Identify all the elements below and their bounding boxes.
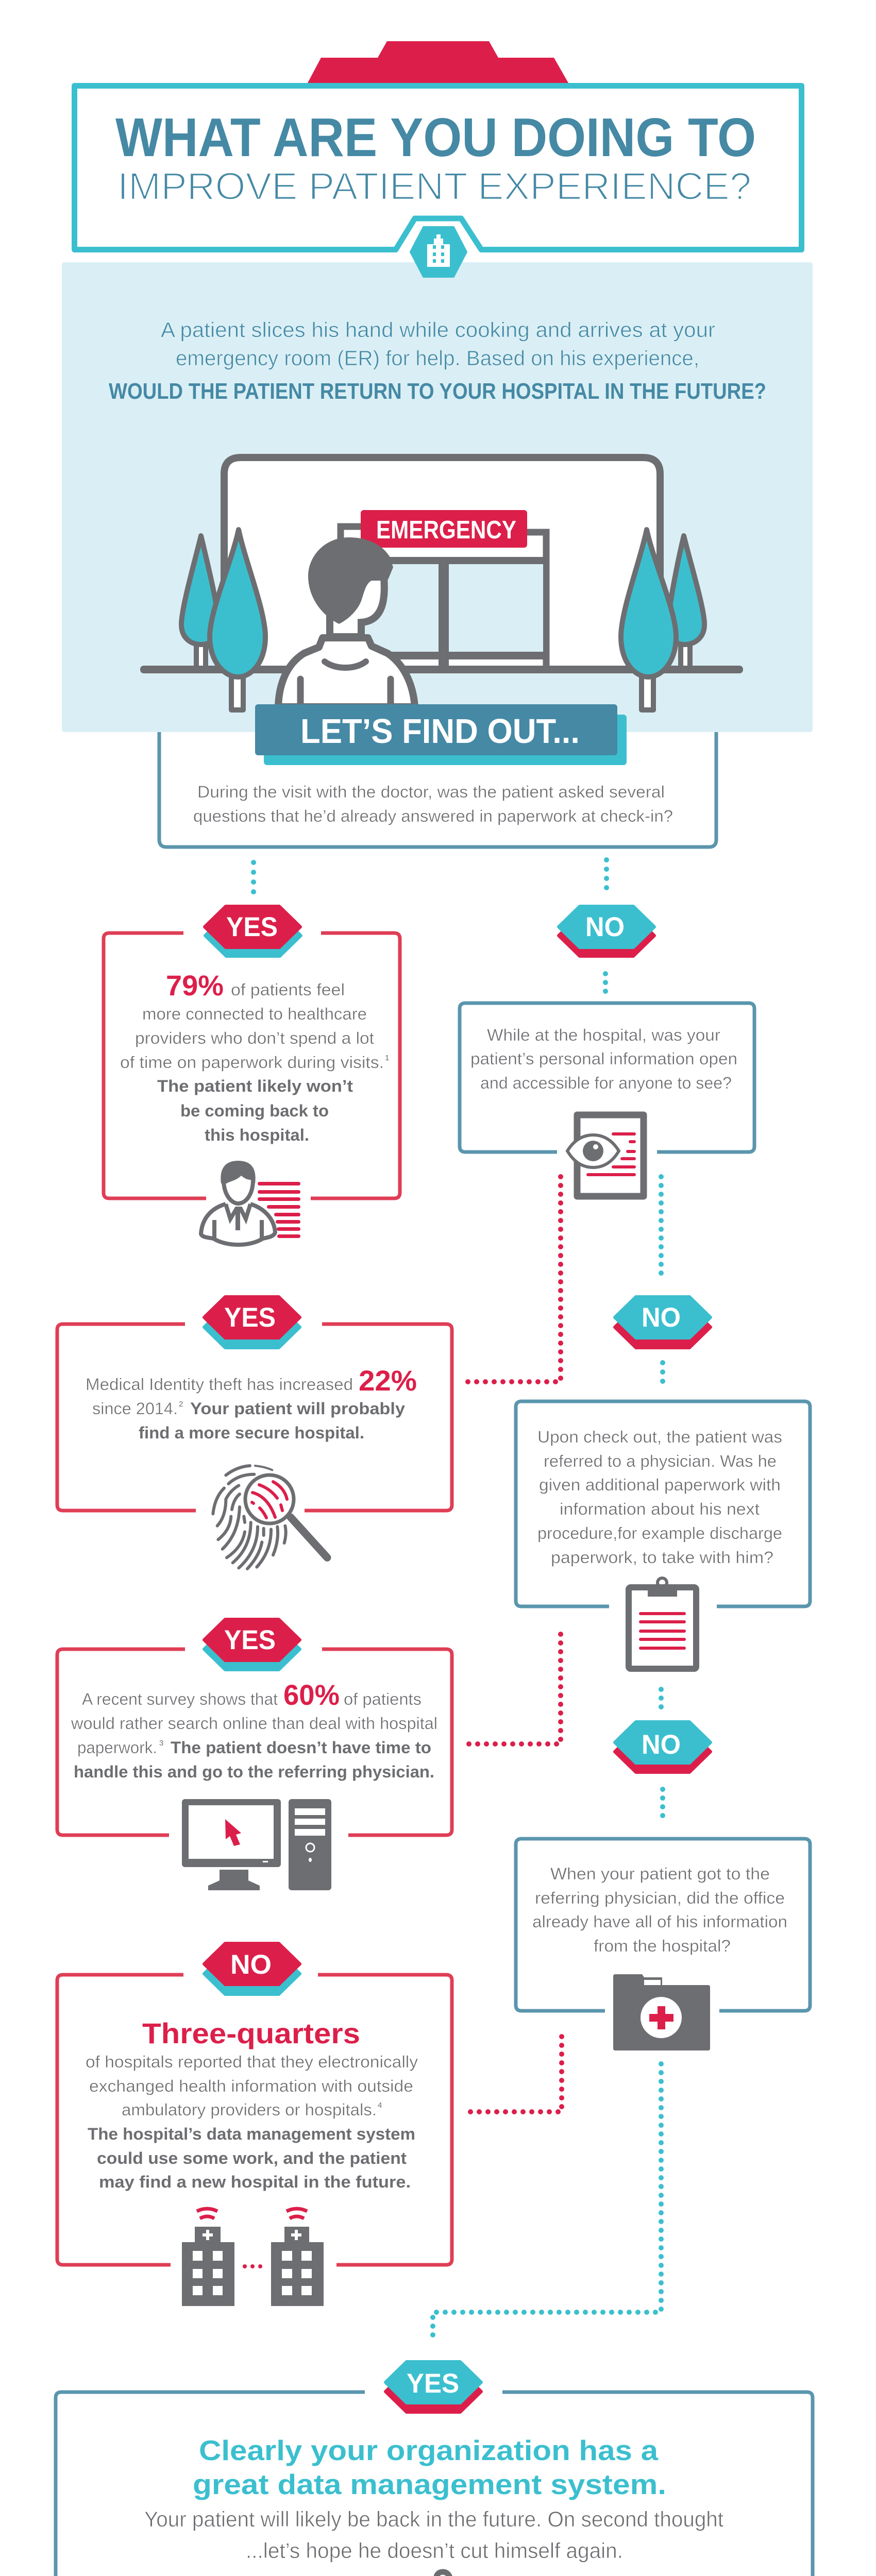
dotted arrow: first question to no — [604, 860, 609, 888]
dotted arrow: box 4 to no — [659, 1689, 664, 1707]
intro text: WOULD THE PATIENT RETURN TO YOUR HOSPITAL IN THE FUTURE? — [109, 379, 766, 404]
panel: additional paperwork question: procedure,for example discharge — [537, 1524, 782, 1543]
text block: 3 — [159, 1739, 163, 1748]
panel: intro background — [62, 262, 813, 732]
title line 2: IMPROVE PATIENT EXPERIENCE? — [117, 165, 751, 208]
text block: The patient doesn’t have time to — [171, 1738, 431, 1757]
panel: no three-quarters — [57, 1943, 452, 2306]
text block: of patients — [344, 1690, 422, 1708]
text block: Your patient will likely be back in the future. On second thought — [144, 2507, 723, 2531]
yes badge: YES — [407, 2368, 459, 2399]
question box 1: questions that he’d already answered in paperwork at check-in? — [193, 807, 673, 825]
red header tab — [308, 41, 568, 83]
no badge 1 — [559, 906, 654, 956]
heading: great data management system. — [193, 2468, 666, 2500]
text block: ...let’s hope he doesn’t cut himself again. — [246, 2538, 623, 2563]
text block: 2 — [179, 1400, 183, 1409]
yes badge: YES — [224, 1625, 276, 1655]
yes badge — [385, 2362, 481, 2412]
illustration: emergency room building — [140, 457, 743, 710]
panel: personal information question — [460, 1003, 754, 1196]
panel: referring physician question — [516, 1839, 810, 2050]
no badge 1: NO — [585, 912, 625, 942]
icon: clipboard — [629, 1578, 696, 1669]
icon: thumbs up — [383, 2572, 482, 2576]
text block: 79% — [166, 969, 224, 1002]
icon: connected hospitals — [182, 2209, 324, 2306]
panel: additional paperwork question — [516, 1401, 810, 1669]
panel: personal information question: While at the hospital, was your — [487, 1026, 720, 1044]
text block: Medical Identity theft has increased — [86, 1375, 353, 1394]
text block: this hospital. — [205, 1126, 309, 1144]
no badge 3 — [615, 1722, 711, 1772]
icon: document with eye — [567, 1115, 644, 1196]
title line 1: WHAT ARE YOU DOING TO — [115, 107, 756, 168]
text block: may find a new hospital in the future. — [99, 2173, 411, 2191]
text block: Your patient will probably — [190, 1399, 405, 1418]
building outline — [224, 457, 660, 669]
panel: referring physician question: referring physician, did the office — [535, 1889, 785, 1907]
dotted arrow: box 4 to yes — [464, 1634, 561, 1744]
intro text: A patient slices his hand while cooking and arrives at your — [161, 318, 715, 342]
question box 1 — [159, 732, 716, 847]
icon: hospital hexagon — [411, 227, 466, 277]
text block: 1 — [385, 1054, 389, 1062]
question box 1: During the visit with the doctor, was the patient asked several — [197, 783, 665, 801]
text block — [144, 2507, 723, 2563]
text block — [71, 1679, 437, 1781]
banner: let's find out — [255, 704, 627, 765]
yes badge — [204, 1619, 300, 1670]
panel: referring physician question: already have all of his information — [532, 1912, 787, 1931]
text block: of hospitals reported that they electronically — [86, 2053, 418, 2071]
text block: 60% — [283, 1679, 340, 1711]
text block: providers who don’t spend a lot — [135, 1029, 374, 1047]
emergency sign — [361, 510, 527, 548]
text block — [120, 969, 389, 1144]
panel: personal information question: and accessible for anyone to see? — [480, 1074, 732, 1092]
yes badge: YES — [226, 912, 278, 942]
text block: of time on paperwork during visits. — [120, 1053, 384, 1072]
dotted arrow: box 6 to no — [464, 2037, 562, 2112]
text block: of patients feel — [231, 980, 345, 999]
text block: ambulatory providers or hospitals. — [122, 2100, 377, 2119]
no badge 2 — [615, 1297, 711, 1348]
no badge — [204, 1943, 300, 1994]
yes badge — [205, 906, 301, 956]
intro text — [109, 318, 766, 404]
text block: be coming back to — [180, 1101, 329, 1120]
panel: additional paperwork question: Upon check out, the patient was — [537, 1428, 782, 1446]
yes badge: YES — [224, 1302, 276, 1333]
no badge 2: NO — [642, 1302, 681, 1333]
icon: desktop computer — [175, 1793, 338, 1893]
no badge 3: NO — [642, 1730, 681, 1760]
text block: 4 — [378, 2101, 382, 2110]
panel: additional paperwork question: given additional paperwork with — [539, 1476, 781, 1494]
dotted arrow: first question to yes — [251, 862, 256, 892]
dotted arrow: box 6 to final yes — [433, 2064, 661, 2343]
panel: yes 79% — [104, 906, 400, 1245]
icon: staff person with paperwork — [201, 1161, 311, 1245]
text block: Three-quarters — [142, 2017, 360, 2049]
panel: yes 60% — [57, 1619, 452, 1893]
title box — [74, 86, 802, 249]
dotted arrow: no to box 2 — [603, 974, 608, 992]
icon: fingerprint and magnifier — [206, 1466, 327, 1569]
dotted arrow: no to box 6 — [660, 1789, 665, 1824]
text block: 22% — [359, 1364, 417, 1397]
text block: find a more secure hospital. — [139, 1423, 364, 1442]
dotted arrow: no to box 4 — [660, 1363, 665, 1382]
trees — [181, 530, 704, 710]
icon: medical folder — [613, 1974, 710, 2050]
dotted arrow: box 2 to yes — [464, 1177, 561, 1382]
panel: referring physician question: When your patient got to the — [550, 1865, 770, 1883]
text block: The patient likely won’t — [157, 1077, 353, 1095]
banner: let's find out: LET’S FIND OUT... — [300, 712, 580, 751]
text block — [86, 2017, 418, 2191]
text block: handle this and go to the referring physician. — [74, 1762, 434, 1781]
text block: since 2014. — [92, 1399, 178, 1418]
panel: referring physician question: from the hospital? — [594, 1937, 731, 1955]
text block: paperwork. — [77, 1738, 157, 1757]
intro text: emergency room (ER) for help. Based on his experience, — [176, 346, 699, 370]
panel: additional paperwork question: information about his next — [560, 1500, 760, 1518]
yes badge — [204, 1297, 300, 1348]
text block: could use some work, and the patient — [97, 2149, 407, 2167]
panel: great data management — [56, 2362, 813, 2576]
ground line — [140, 666, 743, 673]
panel: additional paperwork question: paperwork, to take with him? — [551, 1548, 773, 1567]
text block: would rather search online than deal with hospital — [71, 1714, 437, 1733]
panel: yes 22% — [57, 1297, 452, 1569]
text block — [86, 1364, 417, 1442]
text block: A recent survey shows that — [82, 1690, 278, 1708]
emergency sign: EMERGENCY — [376, 516, 516, 544]
text block: exchanged health information with outside — [89, 2077, 413, 2095]
no badge: NO — [230, 1950, 272, 1980]
heading: Clearly your organization has a — [199, 2434, 658, 2466]
door — [340, 527, 546, 670]
dotted arrow: box 2 to no — [659, 1177, 664, 1281]
text block: more connected to healthcare — [142, 1005, 367, 1023]
panel: personal information question: patient’s personal information open — [470, 1049, 737, 1068]
panel: additional paperwork question: referred to a physician. Was he — [544, 1452, 777, 1470]
heading — [193, 2434, 666, 2500]
man seen from behind — [278, 537, 415, 707]
text block: The hospital’s data management system — [88, 2125, 415, 2143]
